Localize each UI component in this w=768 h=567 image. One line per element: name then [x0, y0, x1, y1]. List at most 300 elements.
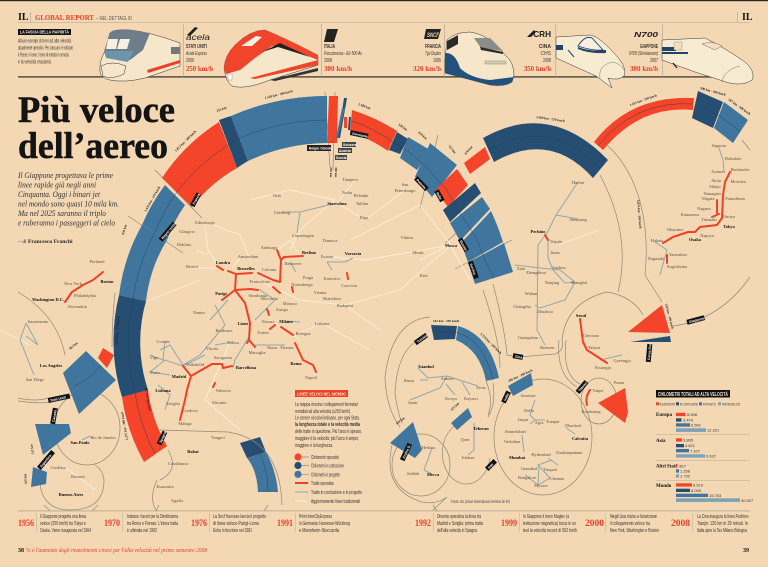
- labels: Asia: Okayama: [667, 227, 683, 232]
- labels: Europe: Glasgow: [179, 229, 196, 234]
- train strip intro: [18, 29, 73, 66]
- speed labels: 300 km: [334, 167, 338, 178]
- country tags: Francia: [192, 193, 201, 205]
- labels: Asia: [404, 143, 750, 488]
- labels: Asia: Amritsar: [520, 393, 536, 398]
- labels: Europe: Saragozza: [214, 355, 232, 360]
- event 1999: levitazione magnetica) tocca in un: [523, 521, 576, 527]
- labels: Europe: Novara: [262, 319, 275, 324]
- event 2000: il collegamento veloce tra: [610, 521, 650, 527]
- segment: Argentina project: [31, 467, 47, 487]
- labels: Asia: Kayseri: [464, 396, 479, 401]
- labels: Asia: Xian: [517, 266, 526, 271]
- country tags: Spagna: [159, 431, 167, 444]
- legend text: mondiali ad alta velocità (≥250 km/h).: [295, 409, 351, 415]
- country tags: Polonia: [415, 178, 427, 190]
- legend text: maggiore è la lunghezza.: [295, 443, 333, 449]
- labels: Europe: Bordeaux: [215, 328, 233, 333]
- labels: Europe: Bristol: [186, 264, 199, 269]
- labels: Europe: Varsavia: [345, 251, 362, 256]
- country tags: Canada: [51, 409, 58, 422]
- labels: Asia: Akita: [711, 178, 721, 183]
- labels: Asia: Hachinohe: [730, 167, 750, 172]
- labels: Asia: Ahmedabad: [504, 429, 526, 434]
- segment: India project: [508, 373, 533, 396]
- labels: Asia: Shenyang: [569, 217, 587, 222]
- labels: Europe: Norimberga: [291, 282, 313, 287]
- labels: Asia: Shenzen: [540, 345, 555, 350]
- train info: Giappone: [629, 24, 663, 77]
- event 1970: tra Roma e Firenze. L'intera tratta: [127, 521, 178, 527]
- country tags: Germania: [352, 132, 368, 139]
- speed labels: 1.433 km · 270 km/h: [143, 186, 161, 212]
- segment: USA operating: [98, 348, 114, 368]
- labels: Europe: Nizza: [267, 345, 277, 350]
- segment: Brazil project: [35, 424, 71, 455]
- speed labels: 550 km: [395, 416, 406, 426]
- labels: Europe: Casablanca: [168, 461, 188, 466]
- event 1991: e Mannheim-Stoccarda: [299, 528, 339, 534]
- labels: Asia: Zhuzhou: [537, 309, 554, 314]
- country tags: Italia: [435, 192, 443, 200]
- train info: Cina: CINA: [539, 44, 551, 50]
- labels: Europe: Petersburgo: [395, 188, 416, 193]
- segment: Turkey project: [456, 326, 499, 381]
- event 1976: 1976: [191, 518, 207, 528]
- legend key: Aggiornamento linee tradizionali: [311, 499, 360, 505]
- segment: Japan construction: [692, 91, 723, 128]
- labels: Europe: Nantes: [193, 310, 205, 315]
- labels: Europe: Essaouira: [156, 484, 174, 489]
- train info: Francia: [413, 24, 445, 77]
- labels: Asia: Vadodara: [504, 439, 520, 444]
- speed labels: 495 km · 300 km/h: [508, 368, 533, 383]
- train info: Italia: ITALIA: [324, 44, 335, 50]
- chart legend: PREVISIONE 2025: [722, 402, 740, 406]
- labels: Asia: Cheonan: [583, 333, 600, 338]
- train: Frecciarossa: [224, 30, 318, 87]
- labels: Europe: Vilnius: [401, 235, 414, 240]
- segment: Regno Unito project: [142, 185, 185, 240]
- speed labels: 590 km · 300 km/h: [700, 86, 726, 97]
- speed labels: 1.451 km · 330 km/h: [629, 93, 657, 107]
- segment: Spagna operating: [122, 390, 167, 462]
- event 1976: Entra in funzione nel 1981: [213, 528, 252, 534]
- event 1956: veloce (250 km/h) tra Tokyo e: [40, 521, 86, 527]
- train info: Cina: CHS: [540, 51, 552, 57]
- train info: Stati Uniti: STATI UNITI: [186, 44, 207, 50]
- byline: – di Francesco Franchi: [17, 239, 73, 245]
- map: traditional lines: [0, 180, 600, 490]
- group: Asia: Asia: [656, 439, 666, 444]
- labels: Europe: Budapest: [337, 303, 354, 308]
- legend text: Le corone circolari indicano, per ogni Stato,: [295, 416, 360, 422]
- segment: Francia operating: [162, 122, 237, 207]
- event 1991: in Germania: Hannover-Würzburg: [299, 521, 350, 527]
- event 1992: [415, 513, 483, 534]
- labels: Europe: Poznan: [321, 254, 334, 259]
- segment: Taiwan operating: [598, 388, 628, 423]
- labels: Europe: Bratislava: [323, 296, 341, 301]
- labels: Europe: Cracovia: [341, 283, 357, 288]
- segment: Portogallo project: [119, 225, 167, 301]
- labels: Americas: New York: [64, 281, 83, 286]
- speed labels: 250 km: [329, 167, 333, 178]
- labels: Europe: Lubiana: [315, 321, 329, 326]
- labels: Asia: Isfahan: [462, 455, 475, 460]
- labels: Europe: Tangeri: [211, 435, 225, 440]
- event 1991: 1991: [277, 518, 293, 528]
- labels: Asia: Changsha: [513, 304, 531, 309]
- labels: Europe: Tolosa: [227, 340, 239, 345]
- train info: Stati Uniti: Acela Express: [185, 51, 207, 57]
- map: lines in construction: [20, 148, 724, 485]
- labels: Asia: Omiya: [723, 214, 735, 219]
- legend key: Chilometri in costruzione: [311, 464, 344, 470]
- labels: Europe: Coruña: [157, 339, 170, 344]
- legend key: Tratte in costruzione e in progetto: [311, 490, 362, 496]
- speed labels: 1.576 km · 200 km/h: [479, 332, 503, 355]
- event 2000: [585, 513, 659, 534]
- train: Acela: [100, 30, 180, 81]
- panel: bar chart totals: [656, 390, 754, 503]
- footer left: 38: [18, 548, 24, 554]
- speed labels: [23, 86, 751, 484]
- speed labels: 330 km: [397, 123, 408, 132]
- labels: Europe: Vitoria: [206, 346, 218, 351]
- event 1992: Madrid e Siviglia: prima tratta: [437, 521, 483, 527]
- labels: Europe: Francoforte: [250, 279, 270, 284]
- labels: Europe: Londra: [216, 260, 231, 265]
- intro text: Il Giappone progettava le prime: [17, 170, 113, 180]
- train strip intro: LA FASCIA DELLA RAPIDITÀ: [20, 30, 69, 35]
- labels: Americas: Cordoba: [50, 465, 66, 470]
- event 1992: dell'alta velocità in Spagna: [437, 528, 477, 534]
- group: Mondo: 30.907: [741, 498, 754, 503]
- labels: Asia: Teheran: [473, 426, 489, 431]
- country tags: Austria: [339, 149, 351, 153]
- segment: USA project: [63, 351, 116, 414]
- labels: Europe: Amburgo: [261, 245, 278, 250]
- labels: Asia: Tokyo: [723, 224, 736, 229]
- labels: Americas: Portland: [90, 259, 105, 264]
- train info: Giappone: GIAPPONE: [640, 44, 658, 50]
- legend text: maggiore è la velocità; più l'arco è ampio,: [295, 436, 359, 442]
- ring: China and Korea: [464, 91, 748, 423]
- group: Altri Stati: 1.256: [680, 468, 691, 474]
- labels: Europe: Porto: [150, 370, 161, 375]
- train info: Cina: [524, 24, 556, 77]
- train info: Francia: 1995: [433, 58, 441, 64]
- train info: Italia: Frecciarossa - Etr 500 Av: [324, 51, 362, 57]
- train info: Giappone: N700 (Shinkansen): [629, 51, 658, 57]
- speed labels: 1.872 km · 300 km/h: [174, 129, 197, 153]
- labels: Europe: Oslo: [273, 193, 282, 198]
- train info: Cina: 2008: [543, 58, 551, 64]
- train info: Giappone: 2007: [650, 58, 658, 64]
- labels: Europe: Katowice: [324, 276, 340, 281]
- segment: Russia project one: [450, 197, 490, 241]
- labels: Asia: Zhengzhou: [526, 270, 547, 275]
- labels: Europe: Parigi: [215, 291, 228, 296]
- labels: Asia: Yamagata: [703, 191, 721, 196]
- labels: Europe: Monaco: [283, 301, 298, 306]
- segment: Russia operating: [435, 169, 468, 207]
- labels: Asia: Delhi: [524, 408, 535, 413]
- labels: Americas: San Diego: [26, 377, 45, 382]
- timeline: [18, 513, 749, 534]
- labels: Asia: Agra: [535, 420, 543, 425]
- labels: Europe: Kiev: [420, 273, 429, 278]
- train info: Stati Uniti: [183, 24, 213, 77]
- labels: Europe: Copenhagen: [292, 233, 315, 238]
- event 1992: Diventa operativa la linea tra: [437, 514, 481, 520]
- country tags: Argentina: [39, 454, 52, 469]
- labels: Americas: Buenos Aires: [59, 492, 84, 497]
- labels: Europe: Zurigo: [276, 307, 289, 312]
- labels: Europe: Colonia: [262, 267, 276, 272]
- group: Mondo: 15.753: [709, 493, 722, 498]
- labels: Asia: Nanjing: [545, 280, 560, 285]
- segment: Russia project two: [461, 211, 503, 262]
- labels: Europe: Cordova: [182, 408, 198, 413]
- labels: Europe: Stoccarda: [260, 296, 278, 301]
- legend text: [295, 402, 362, 449]
- event 1992: 1992: [415, 518, 431, 528]
- event 1999: In Giappone il treno Maglev (a: [523, 514, 569, 520]
- legend text: delle tratte in questione. Più l'arco è spesso,: [295, 429, 362, 435]
- header: IL: [742, 12, 753, 23]
- train info: Giappone: 300 km/h: [630, 65, 658, 73]
- labels: Asia: Yatsushiro: [669, 252, 688, 257]
- speed labels: 5.874 km · 300 km/h: [636, 200, 643, 229]
- legend key: Chilometri in progetto: [311, 472, 340, 478]
- labels: Asia: Qom: [461, 437, 470, 442]
- event 1976: La Sncf francese lancia il progetto: [213, 514, 266, 520]
- group: Europa: 12.321: [707, 428, 720, 433]
- group: Europa: Europa: [656, 413, 673, 418]
- labels: Asia: Guangzhou: [518, 335, 539, 340]
- speed labels: 978 km: [121, 224, 128, 235]
- train info: Francia: Tgv Duplex: [425, 51, 441, 57]
- event 1956: [18, 513, 91, 534]
- labels: Europe: Lione: [238, 321, 248, 326]
- event 1991: Primi InterCityExpress: [299, 514, 332, 520]
- labels: Europe: Tampere: [342, 177, 358, 182]
- labels: Asia: Kanpur: [546, 419, 560, 424]
- labels: Europe: Tallinn: [356, 201, 369, 206]
- labels: Europe: Rabat: [187, 449, 199, 454]
- country tags: Corea Sud: [647, 343, 652, 360]
- labels: Asia: Sapporo: [712, 143, 727, 148]
- intro text: e ruberanno i passeggeri al cielo: [18, 218, 116, 228]
- labels: Asia: Sivas: [476, 385, 486, 390]
- labels: Europe: Bologna: [296, 331, 310, 336]
- labels: Asia: Bursa: [404, 378, 414, 383]
- speed labels: 1.272 km · 300 km/h: [120, 411, 129, 441]
- labels: Europe: Edimburgo: [195, 220, 216, 225]
- labels: Asia: Tianjin: [550, 239, 563, 244]
- segment: Saudi Arabia project: [390, 422, 422, 458]
- labels: Europe: San: [402, 182, 409, 187]
- legend key: [294, 453, 362, 505]
- event 1970: 1970: [104, 518, 120, 528]
- title: [18, 90, 175, 167]
- segment: Germania operating: [350, 110, 397, 151]
- labels: Europe: Danzica: [323, 238, 337, 243]
- segment: China construction: [483, 123, 608, 178]
- speed labels: 670 km: [417, 131, 428, 141]
- chart legend: [656, 402, 740, 406]
- group: Europa: [656, 412, 720, 433]
- chart legend: IN COSTRUZIONE: [680, 402, 698, 406]
- train: N700: [662, 38, 753, 84]
- intro text: Cinquanta. Oggi i binari jet: [18, 189, 101, 199]
- train info: Francia: SNCF: [427, 33, 439, 39]
- labels: Asia: Aomori: [711, 169, 726, 174]
- country tags: Arabia S.: [402, 444, 412, 459]
- labels: Asia: Nagasaki: [648, 256, 665, 261]
- train info: Francia: 320 km/h: [413, 65, 441, 73]
- labels: Europe: Roma: [290, 361, 302, 366]
- legend heading: LINEE VELOCI NEL MONDO: [297, 391, 346, 397]
- labels: Europe: Dublino: [177, 242, 192, 247]
- event 2000: Negli Usa inizia a funzionare: [610, 514, 657, 520]
- labels: Asia: Kanazawa: [681, 212, 699, 217]
- labels: Europe: Lisbona: [155, 388, 171, 393]
- event 1956: Osaka. Viene inaugurata nel 1964: [40, 528, 91, 534]
- event 1956: 1956: [18, 518, 34, 528]
- country tags: Giappone: [689, 316, 705, 324]
- header: IL: [18, 12, 29, 23]
- main ring: Europe and Russia: [113, 96, 513, 462]
- legend key: Tratte operative: [311, 481, 334, 487]
- legend text: La mappa mostra i collegamenti ferroviari: [295, 402, 358, 408]
- train strip intro: il Paese, il nome, l'anno di entrata in servizio: [18, 52, 69, 58]
- train info: Italia: 300 km/h: [324, 65, 352, 73]
- country tags: India: [503, 393, 510, 402]
- header: [18, 12, 753, 23]
- segment: Korea construction: [630, 336, 671, 342]
- labels: Asia: Kagoshima: [667, 264, 687, 269]
- labels: Asia: Jeddah: [407, 471, 420, 476]
- country tags: Belgio Olanda: [309, 147, 332, 151]
- segment: Olanda thin bars: [336, 98, 351, 138]
- train: CRH: [556, 35, 625, 88]
- labels: Asia: Tirupati: [543, 467, 558, 472]
- segment: Polonia project: [415, 143, 457, 197]
- train info: Cina: CRH: [533, 30, 551, 39]
- labels: Asia: Visakhapatnam: [555, 450, 583, 455]
- labels: Asia: Guntakal: [521, 466, 538, 471]
- ring: Americas: [31, 348, 116, 487]
- labels: Asia: Ankara: [441, 376, 454, 381]
- labels: Europe: Helsinki: [354, 193, 369, 198]
- header: – NEL DETTAGLIO: [96, 16, 132, 22]
- labels: Europe: Vienna: [314, 290, 326, 295]
- segment: Germania construction: [389, 132, 408, 154]
- labels: Europe: Turku: [342, 190, 353, 195]
- segment: China operating: [594, 98, 694, 150]
- segment: Russia construction: [443, 183, 481, 222]
- timeline axis: [18, 510, 750, 512]
- speed labels: 867 km operativi: [144, 387, 152, 412]
- labels: Americas: Rio de Janeiro: [90, 435, 116, 440]
- labels: Asia: Mysore: [534, 483, 548, 488]
- group: Altri Stati: [656, 464, 691, 478]
- train: TGV Duplex: [445, 32, 514, 86]
- labels: Asia: Calcutta: [572, 436, 589, 441]
- group: Mondo: Mondo: [656, 484, 672, 489]
- labels: Europe: Milano: [279, 319, 294, 324]
- segment: Turkey construction: [431, 325, 457, 340]
- labels: Europe: Vigo: [150, 355, 159, 360]
- labels: Asia: Pechino: [531, 229, 546, 234]
- legend: [294, 390, 362, 505]
- event 1970: [104, 513, 178, 534]
- speed labels: 362 km: [68, 341, 79, 351]
- speed labels: 233 km: [216, 106, 227, 113]
- speed labels: 1.520 km · 300 km/h: [264, 89, 293, 100]
- legend key: Chilometri operativi: [311, 455, 339, 461]
- speed labels: 511 km: [29, 444, 35, 455]
- event 2008: [671, 513, 749, 534]
- labels: Asia: Jaipur: [518, 417, 529, 422]
- labels: Europe: Strasburgo: [249, 293, 268, 298]
- chart legend: IN PROGETTO: [703, 402, 716, 406]
- labels: Europe: Bruxelles: [237, 266, 255, 271]
- labels: Asia: Osaka: [689, 237, 702, 242]
- labels: Europe: Napoli: [305, 375, 318, 380]
- intro text: linee rapide già negli anni: [18, 180, 97, 190]
- segment: Japan project: [714, 102, 748, 143]
- labels: Europe: Valencia: [215, 388, 231, 393]
- group: Europa: 3.474: [683, 418, 694, 422]
- chart legend: ESISTENTI: [660, 402, 675, 406]
- ring: Middle East and India: [390, 325, 533, 458]
- speed labels: 670 km: [464, 145, 474, 156]
- event 1956: Il Giappone progetta una linea: [40, 514, 86, 520]
- train info: Stati Uniti: 250 km/h: [186, 65, 213, 73]
- event 2000: 2000: [585, 518, 605, 528]
- labels: Europe: Amsterdam: [238, 254, 259, 259]
- labels: Asia: Medina: [421, 445, 435, 450]
- train strip intro: attualmente operativi. Per ciascuno è indicato: [18, 46, 73, 52]
- country tags: [37, 130, 705, 471]
- segment: thin red link: [464, 147, 490, 174]
- labels: Asia: Shanghai: [571, 280, 588, 285]
- event 1976: [191, 513, 266, 534]
- speed labels: 1.300 km: [358, 102, 371, 110]
- labels: Asia: Takasaki: [701, 217, 718, 222]
- map: operating lines: [65, 172, 730, 420]
- group: Altri Stati: 1.732: [680, 474, 691, 478]
- labels: Asia: Seoul: [576, 313, 587, 318]
- labels: Asia: Chennai: [550, 476, 565, 481]
- labels: Asia: Wuhan: [525, 291, 538, 296]
- labels: Europe: Alicante: [212, 400, 226, 405]
- speed labels: 711 km: [447, 144, 457, 155]
- event 1999: [501, 513, 577, 534]
- labels: Europe: Barcellona: [236, 365, 257, 370]
- labels: Asia: Nagano: [697, 206, 712, 211]
- labels: Asia: Kaohsiung: [581, 409, 601, 414]
- speed labels: 330 km · 300 km/h: [664, 303, 675, 330]
- footer left: % è l'aumento degli investimenti cinesi per l'alta velocità nel primo semestre 2008: [26, 548, 207, 554]
- event 2008: Tianjin: 120 km in 29 minuti. In: [697, 521, 748, 527]
- event 1999: test la velocità record di 552 km/h: [523, 528, 577, 534]
- train info: Giappone: N700: [634, 32, 658, 39]
